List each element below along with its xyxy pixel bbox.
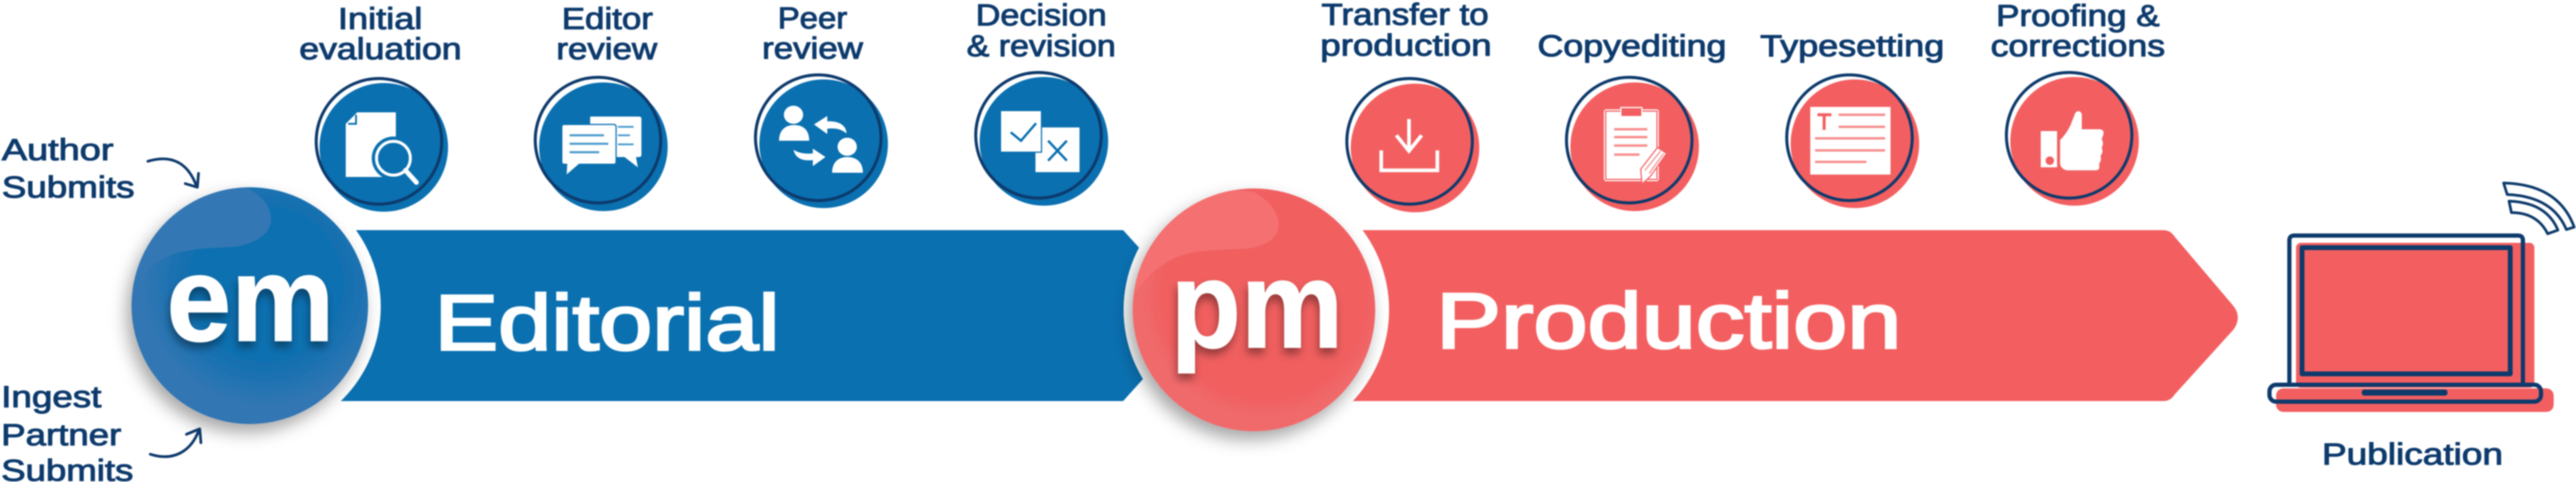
icon: clipboard and pencil (1604, 108, 1667, 184)
label: Author Submits: Author (2, 133, 113, 167)
badge: pm circle (1116, 175, 1389, 443)
step: Proofing & corrections: corrections (1991, 29, 2165, 63)
icon: speech bubbles (562, 117, 641, 176)
label: Ingest Partner Submits (1, 380, 133, 482)
icon: check and cross documents (1000, 111, 1080, 172)
step: Editor review: Editor (562, 2, 653, 36)
step: Copyediting: Copyediting (1538, 29, 1726, 63)
panel: editorial arrow bar (338, 232, 1198, 399)
icon: laptop (2269, 183, 2574, 412)
step: Copyediting (1538, 29, 1726, 211)
icon: download tray (1381, 119, 1437, 170)
step: Decision & revision (967, 0, 1116, 205)
heading: Production: Production (1436, 277, 1901, 365)
step: Proofing & corrections (1991, 0, 2165, 205)
step: Decision & revision: & revision (967, 29, 1116, 63)
logo text: em: em (167, 232, 334, 367)
step: Initial evaluation (299, 2, 462, 211)
icon: thumbs up (2041, 111, 2104, 170)
icon: typeset page (1810, 107, 1891, 175)
panel: production arrow bar (1346, 230, 2238, 401)
label: Author Submits: Submits (2, 170, 135, 204)
arrow: author to em (148, 159, 199, 187)
label: Author Submits (2, 133, 135, 204)
step: Typesetting: Typesetting (1760, 29, 1944, 63)
step: Peer review: review (762, 31, 863, 65)
step: Editor review (535, 2, 667, 211)
step: Typesetting (1760, 29, 1944, 208)
step: Initial evaluation: Initial (338, 2, 422, 36)
logo text: pm: pm (1171, 236, 1343, 374)
heading: Editorial: Editorial (434, 278, 780, 367)
label: Publication: Publication (2322, 437, 2503, 471)
icon: document with magnifier (346, 112, 416, 182)
step: Peer review (755, 1, 888, 208)
label: Ingest Partner Submits: Ingest (1, 380, 101, 414)
step: Transfer to production: production (1320, 28, 1492, 62)
icon: people exchanging (779, 106, 863, 173)
badge: em circle (109, 175, 381, 438)
arrow: ingest to em (150, 429, 201, 457)
label: Ingest Partner Submits: Partner (1, 418, 121, 452)
icon: wifi signal (2504, 183, 2574, 234)
step: Transfer to production (1320, 0, 1492, 213)
step: Editor review: review (556, 32, 658, 66)
step: Initial evaluation: evaluation (299, 32, 462, 66)
step: Peer review: Peer (778, 1, 847, 35)
